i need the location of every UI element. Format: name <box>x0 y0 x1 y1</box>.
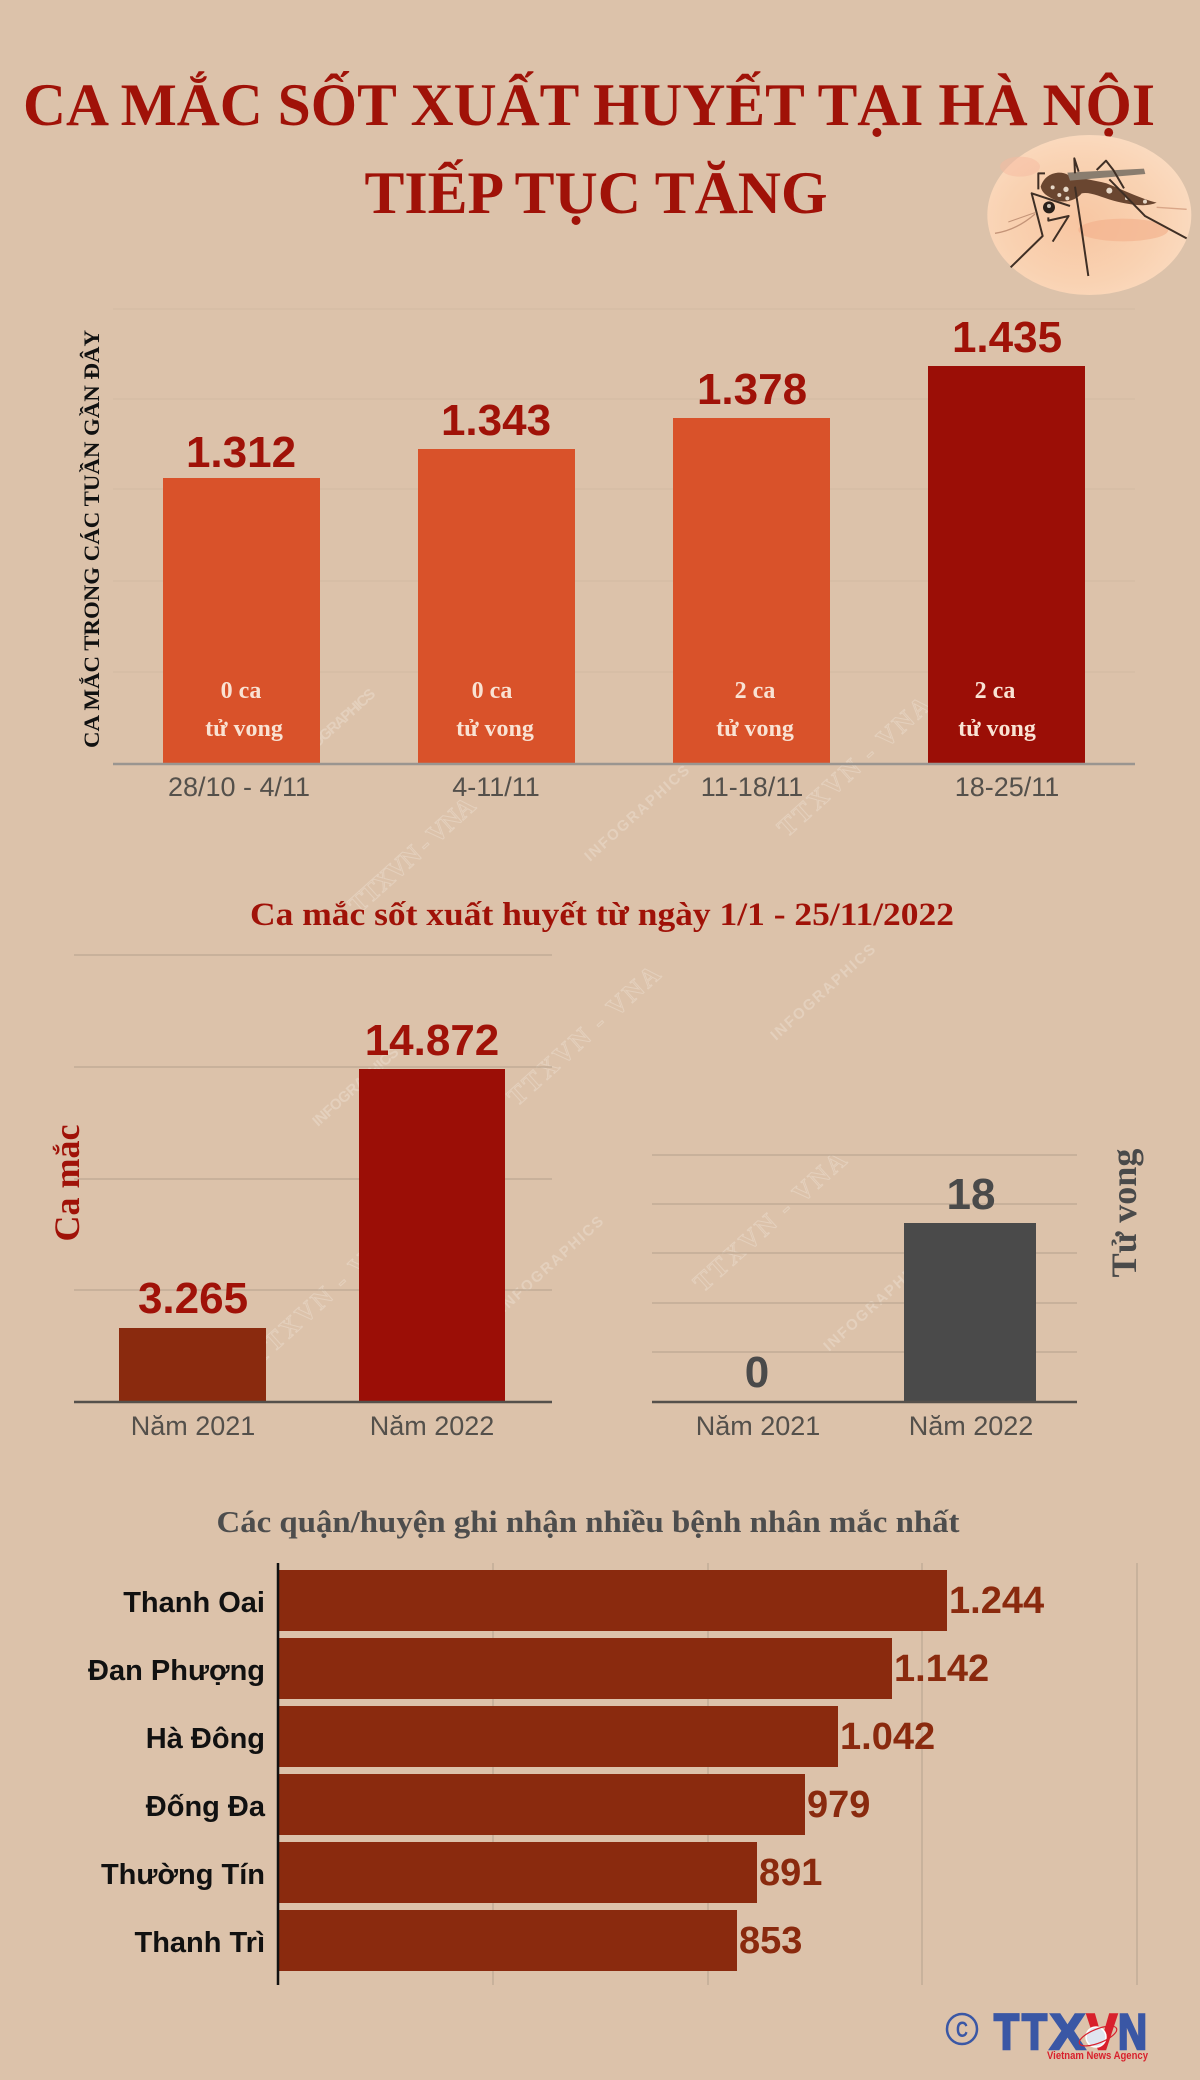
bar: 2022 deaths <box>904 1170 1036 1441</box>
title: TIẾP TỤC TĂNG <box>364 160 828 226</box>
row: Thanh Trì: Thanh Trì <box>134 1927 265 1959</box>
logo: TTXVN: T <box>994 2004 1019 2060</box>
bar: 28/10 - 4/11: 28/10 - 4/11 <box>168 772 310 802</box>
row: Đan Phượng <box>88 1638 989 1699</box>
chart: districts horizontal bars <box>88 1563 1137 1985</box>
row: Hà Đông <box>146 1706 935 1767</box>
bar: 18-25/11: 18-25/11 <box>955 772 1059 802</box>
row: Thanh Trì <box>134 1910 802 1971</box>
watermarks: INFOGRAPHICS <box>495 1213 607 1316</box>
axis label: weekly cases: CA MẮC TRONG CÁC TUẦN GẦN ĐÂY <box>79 330 104 748</box>
row: Đống Đa: Đống Đa <box>146 1791 266 1823</box>
heading: districts: Các quận/huyện ghi nhận nhiều bệnh nhân mắc nhất <box>216 1504 960 1539</box>
bar: 18-25/11 <box>928 313 1085 802</box>
bar: 4-11/11 <box>418 396 575 802</box>
heading: yearly cases: Ca mắc sốt xuất huyết từ ngày 1/1 - 25/11/2022 <box>250 897 954 933</box>
title: CA MẮC SỐT XUẤT HUYẾT TẠI HÀ NỘI <box>23 72 1155 138</box>
watermarks: INFOGRAPHICS <box>767 941 879 1044</box>
bar: 18-25/11: tử vong <box>958 716 1036 742</box>
watermarks: TTXVN - VNA <box>343 791 481 919</box>
bar: 2022 cases: Năm 2022 <box>370 1411 494 1441</box>
row: Đan Phượng: Đan Phượng <box>88 1655 265 1687</box>
bar: 18-25/11: 1.435 <box>952 313 1062 362</box>
bar: 2022 cases <box>359 1016 505 1441</box>
watermarks: INFOGRAPHICS <box>309 1044 402 1130</box>
row: Thanh Oai: 1.244 <box>949 1580 1044 1622</box>
bar: 2021 cases: Năm 2021 <box>131 1411 255 1441</box>
bar: 11-18/11: 1.378 <box>697 365 807 414</box>
title <box>23 72 1155 226</box>
logo: TTXVN: T <box>1022 2004 1047 2060</box>
logo: TTXVN: C <box>956 2017 968 2042</box>
watermarks: INFOGRAPHICS <box>581 762 693 865</box>
logo: TTXVN <box>947 2004 1149 2062</box>
row: Thanh Trì: 853 <box>739 1920 802 1962</box>
row: Thanh Oai <box>123 1570 1044 1631</box>
watermarks: TTXVN - VNA <box>772 690 936 842</box>
watermarks: TTXVN - VNA <box>502 959 666 1111</box>
logo: TTXVN: X <box>1050 2004 1085 2060</box>
bar: 4-11/11: tử vong <box>456 716 534 742</box>
bar: 2021 deaths: Năm 2021 <box>696 1411 820 1441</box>
bar: 28/10 - 4/11: 1.312 <box>186 428 296 477</box>
bar: 28/10 - 4/11 <box>163 428 320 802</box>
watermarks: INFOGRAPHICS <box>293 685 379 765</box>
watermarks: TTXVN - VNA <box>244 1218 408 1370</box>
bar: 11-18/11: 11-18/11 <box>701 772 803 802</box>
bar: 2022 deaths: Năm 2022 <box>909 1411 1033 1441</box>
bar: 2022 deaths: 18 <box>947 1170 995 1219</box>
bar: 28/10 - 4/11: tử vong <box>205 716 283 742</box>
row: Đan Phượng: 1.142 <box>894 1648 989 1690</box>
logo: TTXVN: Vietnam News Agency <box>1047 2050 1149 2062</box>
bar: 2022 cases: 14.872 <box>365 1016 499 1065</box>
chart: cases 2021 vs 2022 <box>47 955 552 1441</box>
row: Thường Tín: 891 <box>759 1852 822 1894</box>
bar: 2021 deaths <box>696 1348 820 1441</box>
axis label: deaths: Tử vong <box>1104 1149 1144 1277</box>
bar: 2021 cases: 3.265 <box>138 1274 248 1323</box>
row: Hà Đông: Hà Đông <box>146 1723 265 1755</box>
bar: 2021 deaths: 0 <box>745 1348 769 1397</box>
watermarks <box>244 685 936 1370</box>
watermarks: INFOGRAPHICS <box>820 1252 932 1355</box>
logo: TTXVN: V <box>1087 2004 1118 2060</box>
bar: 4-11/11: 4-11/11 <box>452 772 540 802</box>
bar: 4-11/11: 1.343 <box>441 396 551 445</box>
axis label: cases: Ca mắc <box>47 1124 87 1241</box>
row: Thường Tín <box>101 1842 822 1903</box>
row: Hà Đông: 1.042 <box>840 1716 935 1758</box>
bar: 11-18/11: tử vong <box>716 716 794 742</box>
row: Thường Tín: Thường Tín <box>101 1859 265 1891</box>
bar: 28/10 - 4/11: 0 ca <box>221 678 261 704</box>
chart: weekly cases bar chart <box>79 309 1135 802</box>
bar: 4-11/11: 0 ca <box>472 678 512 704</box>
chart: deaths 2021 vs 2022 <box>652 1149 1144 1441</box>
row: Đống Đa: 979 <box>807 1784 870 1826</box>
logo: TTXVN: N <box>1118 2004 1147 2060</box>
bar: 11-18/11 <box>673 365 830 802</box>
row: Thanh Oai: Thanh Oai <box>123 1587 265 1619</box>
watermarks: TTXVN - VNA <box>688 1145 852 1297</box>
bar: 18-25/11: 2 ca <box>975 678 1015 704</box>
bar: 11-18/11: 2 ca <box>735 678 775 704</box>
bar: 2021 cases <box>119 1274 266 1441</box>
icon: mosquito on skin <box>987 135 1191 295</box>
row: Đống Đa <box>146 1774 870 1835</box>
